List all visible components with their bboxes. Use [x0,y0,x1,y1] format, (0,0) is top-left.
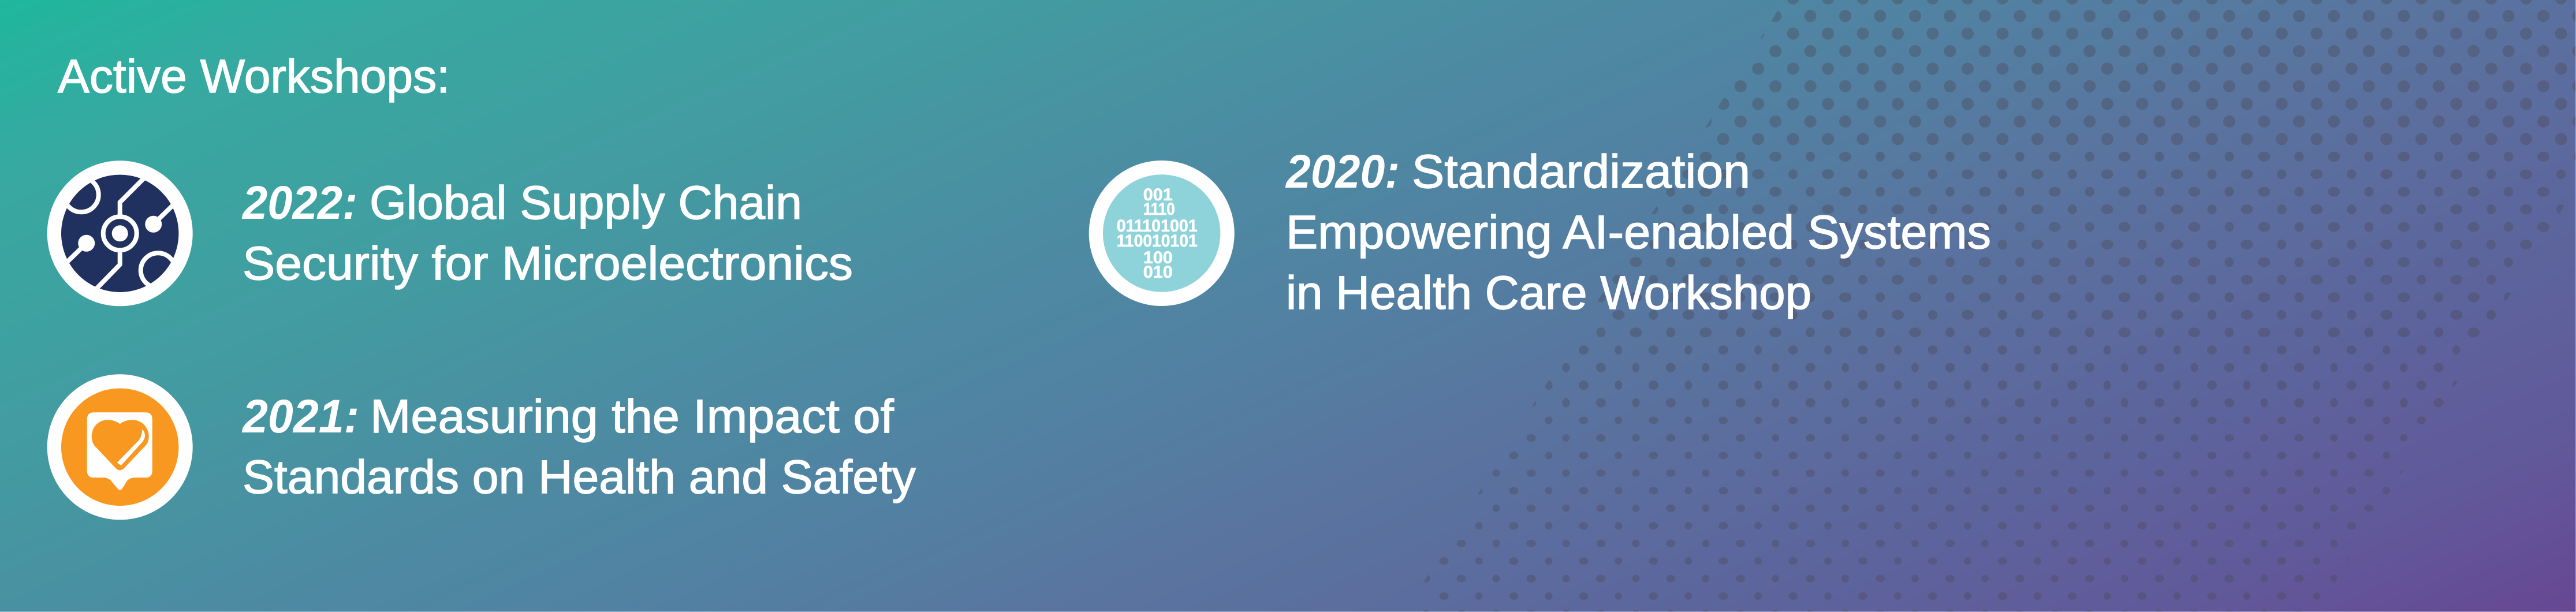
icon: binary [1089,161,1235,306]
text: 2020 workshop [1285,145,1991,319]
icon: binary: 100 [1143,248,1173,267]
halftone dot pattern [1386,0,2576,612]
text: 2020 workshop: Empowering AI-enabled Systems [1286,206,1991,259]
text: 2021 workshop [241,390,916,503]
text: 2021 workshop: Measuring the Impact of [370,390,894,443]
icon: heart speech bubble [47,374,193,520]
icon: binary: 110010101 [1117,232,1198,251]
text: 2020 workshop: in Health Care Workshop [1286,267,1811,319]
icon: binary: 011101001 [1117,217,1198,236]
heading: Active Workshops: Active Workshops: [58,50,450,103]
text: 2021 workshop: Standards on Health and Safety [243,451,916,503]
icon: binary: 010 [1143,263,1173,282]
text: 2022 workshop: Security for Microelectronics [243,237,853,290]
icon: binary: 001 [1143,185,1173,204]
text: 2022 workshop: 2022: [241,177,357,229]
text: 2022 workshop: Global Supply Chain [370,177,802,229]
text: 2020 workshop: Standardization [1412,145,1750,198]
icon: binary: 1110 [1143,200,1175,219]
text: 2021 workshop: 2021: [241,390,359,443]
text: 2020 workshop: 2020: [1285,145,1400,198]
text: 2022 workshop [241,177,853,290]
icon: circuit [47,161,193,306]
